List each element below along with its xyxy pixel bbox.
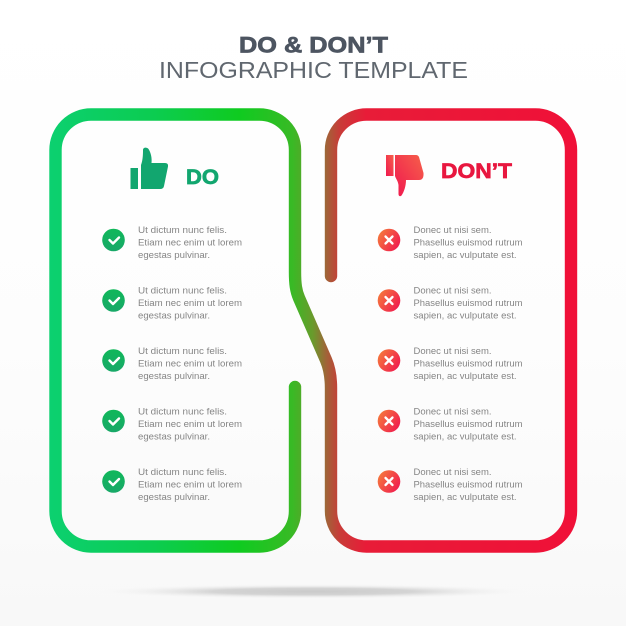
do item 5: Ut dictum nunc felis. <box>138 467 227 478</box>
title <box>159 32 468 83</box>
do item 4: Ut dictum nunc felis. <box>138 406 227 418</box>
do item 4 <box>102 406 242 442</box>
do item 3: Ut dictum nunc felis. <box>138 346 227 357</box>
don't item 4: Donec ut nisi sem. <box>414 406 492 418</box>
icon: thumbs down <box>386 155 424 196</box>
do item 2: Etiam nec enim ut lorem <box>138 298 242 309</box>
heading: DO: DO <box>186 166 219 189</box>
don't item 2: sapien, ac vulputate est. <box>414 310 516 322</box>
do item 5: Etiam nec enim ut lorem <box>138 480 242 490</box>
do item 4: Etiam nec enim ut lorem <box>138 419 242 430</box>
do item 1: Etiam nec enim ut lorem <box>138 238 242 248</box>
don't item 3 <box>378 346 522 382</box>
don't item 1: sapien, ac vulputate est. <box>414 250 516 261</box>
don't item 4: Phasellus euismod rutrum <box>414 419 522 430</box>
do item 3: Etiam nec enim ut lorem <box>138 358 242 370</box>
don't item 2 <box>378 286 522 322</box>
do item 1: egestas pulvinar. <box>138 250 210 261</box>
don't item 1: Donec ut nisi sem. <box>414 225 492 236</box>
icon: thumbs up <box>130 148 168 189</box>
don't item 2: Donec ut nisi sem. <box>414 286 492 296</box>
do item 2 <box>102 286 242 322</box>
do item 1: Ut dictum nunc felis. <box>138 225 227 236</box>
title: DO & DON’T <box>239 32 389 58</box>
don't item 4: sapien, ac vulputate est. <box>414 432 516 442</box>
do item 2: egestas pulvinar. <box>138 310 210 322</box>
do item 3: egestas pulvinar. <box>138 371 210 382</box>
do item 4: egestas pulvinar. <box>138 432 210 442</box>
do item 2: Ut dictum nunc felis. <box>138 286 227 296</box>
don't item 5: Donec ut nisi sem. <box>414 467 492 478</box>
don't item 2: Phasellus euismod rutrum <box>414 298 522 309</box>
heading: DON'T: DON’T <box>441 160 512 183</box>
do item 1 <box>102 225 242 261</box>
don't item 5: Phasellus euismod rutrum <box>414 480 522 490</box>
ground shadow <box>91 584 535 599</box>
don't item 1: Phasellus euismod rutrum <box>414 238 522 248</box>
do item 3 <box>102 346 242 382</box>
S-shaped panel outline <box>56 114 571 546</box>
don't item 3: Donec ut nisi sem. <box>414 346 492 357</box>
don't item 4 <box>378 406 522 442</box>
don't item 3: sapien, ac vulputate est. <box>414 371 516 382</box>
don't item 5: sapien, ac vulputate est. <box>414 492 516 503</box>
don't item 1 <box>378 225 522 261</box>
don't item 3: Phasellus euismod rutrum <box>414 358 522 370</box>
do item 5 <box>102 467 242 503</box>
don't item 5 <box>378 467 522 503</box>
title: INFOGRAPHIC TEMPLATE <box>159 57 468 83</box>
do item 5: egestas pulvinar. <box>138 492 210 503</box>
